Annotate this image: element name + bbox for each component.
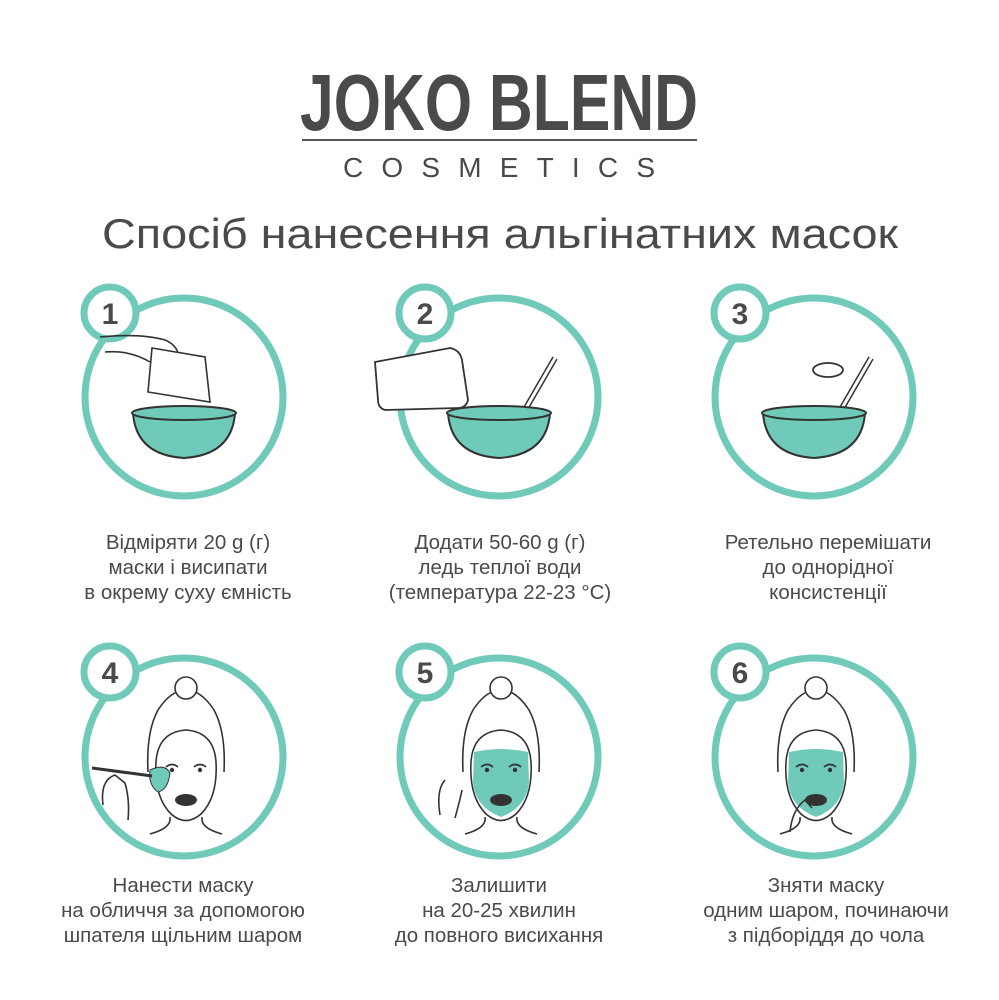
step 4 text: на обличчя за допомогою [61,899,305,922]
step 3 text: до однорідної [762,556,894,579]
step 5 text: на 20-25 хвилин [422,899,576,922]
icon: spatula [522,358,555,415]
step 5 text: Залишити [451,874,547,897]
step 2 text: (температура 22-23 °С) [389,581,611,604]
step 2 text: Додати 50-60 g (г) [415,531,585,554]
step 6 text [703,874,949,947]
step 4 text: Нанести маску [113,874,254,897]
step 3 [714,287,913,496]
icon: face removing mask [778,677,854,834]
step 2 text: ледь теплої води [419,556,581,579]
step 6 text: Зняти маску [768,874,885,897]
step 1 text: маски і висипати [108,556,268,579]
step 4 text: шпателя щільним шаром [64,924,302,947]
icon: bowl [448,408,550,458]
step 1 text [84,531,292,604]
step 3 text: Ретельно перемішати [725,531,931,554]
step 2 [375,287,598,496]
step 3: 3 [732,298,748,331]
step 3 text: консистенції [769,581,887,604]
step 4 [84,646,283,856]
icon: rotate arrow [813,363,843,377]
step 6 [714,646,913,856]
step 5 [399,646,598,856]
step 1 [84,287,283,496]
step 5: 5 [417,657,433,690]
step 6: 6 [732,657,748,690]
icon: bowl [763,408,865,458]
icon: face with mask [463,677,539,834]
step 5 text [395,874,603,947]
title: Спосіб нанесення альгінатних масок [102,210,899,257]
step 1 text: Відміряти 20 g (г) [106,531,270,554]
icon: bowl [133,408,235,458]
step 1 text: в окрему суху ємність [84,581,292,604]
step 6 text: з підборіддя до чола [728,924,925,947]
logo: COSMETICS [343,152,655,183]
step 6 text: одним шаром, починаючи [703,899,949,922]
icon: face [148,677,224,834]
step 2 text [389,531,611,604]
step 1: 1 [102,298,118,331]
step 4 text [61,874,305,947]
step 5 text: до повного висихання [395,924,603,947]
step 3 text [725,531,931,604]
icon: cup pouring [375,348,468,410]
logo: JOKO BLEND [300,58,698,147]
logo [300,58,698,183]
step 2: 2 [417,298,433,331]
icon: hand with sachet [100,336,210,402]
step 4: 4 [102,657,119,690]
